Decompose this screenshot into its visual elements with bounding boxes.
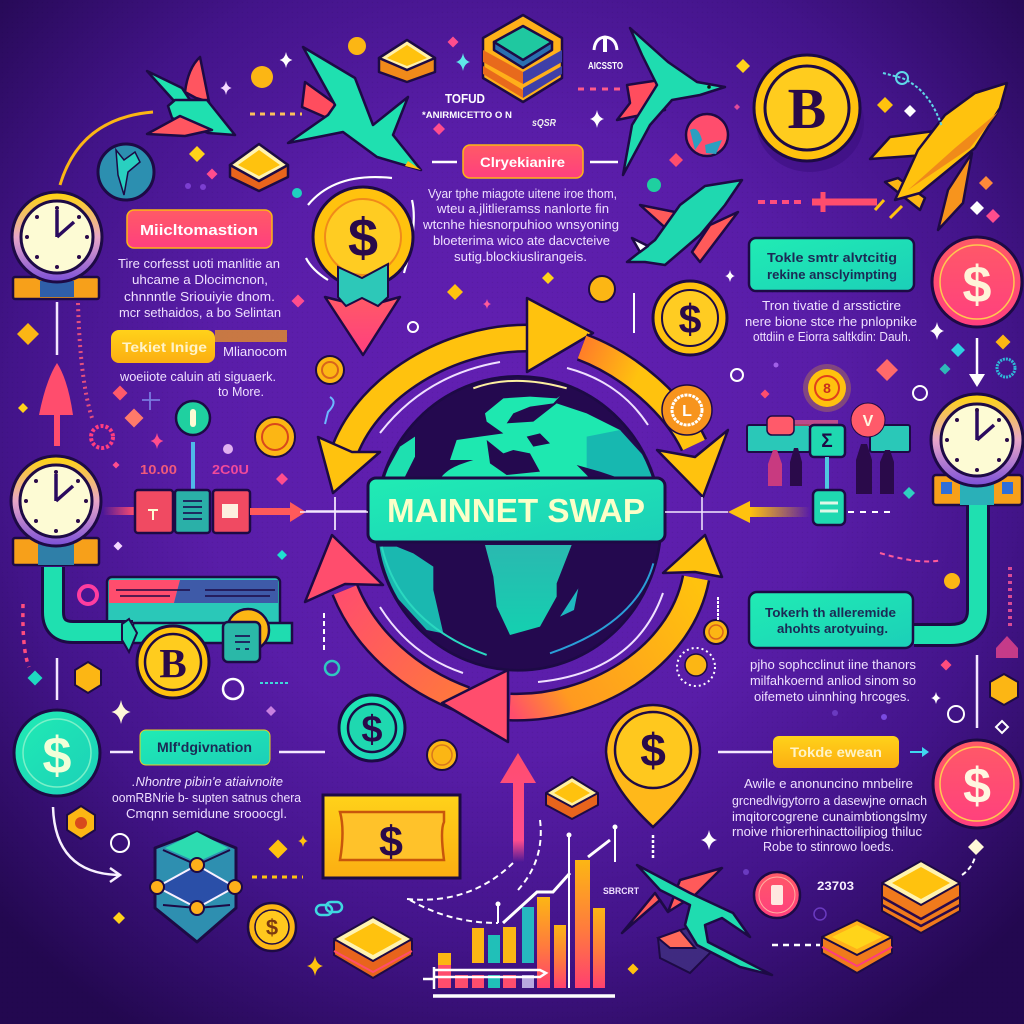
icon: small coin and document xyxy=(223,609,269,662)
icon: red dollar coin lower right xyxy=(933,740,1021,828)
icon: gold coin xyxy=(255,417,295,457)
panel: Clryekianire heading: Clryekianire xyxy=(480,154,565,170)
arrow: red up arrow left xyxy=(39,302,92,446)
panel: Tekiet Inige label: Tekiet Inige xyxy=(122,339,207,355)
decorations: top right sparkles xyxy=(875,97,1000,223)
text: Token box paragraph: pjho sophcclinut iine thanors xyxy=(750,658,916,672)
icon: dollar bill: $ xyxy=(379,818,403,866)
text: Miicltomastion paragraph xyxy=(118,257,281,320)
text: Token box paragraph: oifemeto uinnhing hrcoges. xyxy=(754,690,910,704)
arrow: red dashed left arrow xyxy=(758,192,877,212)
panel: Midgivnation heading: Mlf'dgivnation xyxy=(157,739,252,755)
decorations: left middle items xyxy=(17,294,304,485)
text: Tokde paragraph: imqitorcogrene cunaimbtiongslmy xyxy=(732,810,928,824)
text: Tokde paragraph: Robe to stinrowo loeds. xyxy=(763,840,894,854)
text: Clryekianire paragraph: wtcnhe hiesnorpuhioo wnsyoning xyxy=(422,218,619,232)
decorations: inner thin arcs xyxy=(380,362,663,682)
icon: small globe xyxy=(98,144,154,200)
icon: small gold stack xyxy=(822,920,892,973)
icon: bitcoin coin lower left: B xyxy=(159,640,187,686)
text: Clryekianire paragraph: bloeterima wico ate dacvcteive xyxy=(433,234,610,248)
decorations: bottom right xyxy=(743,839,984,945)
text: timeline numbers xyxy=(140,463,249,477)
text: Clryekianire paragraph xyxy=(422,187,619,264)
panel: Tekiet Inige label xyxy=(111,330,287,363)
icon: crate stack xyxy=(483,15,562,102)
icon: red dollar coin upper right: $ xyxy=(963,256,992,314)
icon: bitcoin coin top right: B xyxy=(788,76,826,141)
icon: dollar coin right of center: $ xyxy=(679,296,702,342)
chart: growth bar chart xyxy=(407,820,618,996)
decorations: upper centre small items xyxy=(316,270,735,424)
text: Tokde paragraph: Awile e anonuncino mnbelire xyxy=(744,777,913,791)
flow: community nodes: V xyxy=(863,413,874,430)
text: Tekiet paragraph xyxy=(119,370,276,399)
text: Miicltomastion paragraph: Tire corfesst uoti manlitie an xyxy=(118,257,280,271)
icon: red dollar coin lower right: $ xyxy=(963,758,991,814)
icon: blockchain hex xyxy=(150,832,242,942)
text: Tokde paragraph: grcnedlvigytorro a dasewjne ornach xyxy=(732,794,927,808)
text: top small labels: sQSR xyxy=(532,118,557,129)
text: top small labels: *ANIRMICETTO O N xyxy=(422,110,512,121)
text: Tokde paragraph: rnoive rhiorerhinacttoilipiog thiluc xyxy=(732,825,922,839)
icon: bitcoin coin top right xyxy=(754,55,864,172)
panel: Token box: Tokerh th alleremide xyxy=(765,605,896,620)
icon: globe xyxy=(376,376,661,670)
panel: Tokle heading xyxy=(749,238,914,291)
icon: right teal plane xyxy=(617,28,725,175)
decorations: ring connector lines xyxy=(300,497,728,530)
icon: teal dollar coin left xyxy=(14,710,100,796)
panel: Tokle heading: rekine ansclyimpting xyxy=(767,267,897,282)
icon: teal shark plane xyxy=(627,180,742,265)
text: Tokle paragraph: ottdiin e Eiorra saltkdin: Dauh. xyxy=(753,330,911,344)
icon: teal pin with stem xyxy=(176,401,210,490)
flow: community nodes: Σ xyxy=(821,431,833,452)
panel: Tokle heading: Tokle smtr alvtcitig xyxy=(767,250,897,265)
icon: gold block center xyxy=(546,777,598,819)
icon: teal dollar coin center: $ xyxy=(361,709,383,751)
icon: bitcoin coin lower left xyxy=(137,626,209,698)
flow: community nodes xyxy=(747,403,910,525)
text: Tekiet paragraph: to More. xyxy=(218,385,264,399)
icon: gold rocket plane xyxy=(870,83,1007,230)
icon: small coin below center xyxy=(427,740,457,770)
panel: Token box: ahohts arotyuing. xyxy=(777,621,888,636)
banner: title xyxy=(368,478,665,542)
text: timeline numbers: 10.00 xyxy=(140,463,177,477)
arrow: bottom-left red ring arrow xyxy=(305,535,508,742)
icon: teal plane top xyxy=(288,47,421,170)
arrow: white curved arrow to hex xyxy=(53,807,120,882)
panel: Tokde heading xyxy=(718,736,929,768)
panel: Miicltomastion heading xyxy=(127,210,272,248)
icon: chain link xyxy=(316,902,342,915)
text: Tokle paragraph: Tron tivatie d arsstictire xyxy=(762,299,901,313)
text: timeline numbers: 2C0U xyxy=(212,463,249,477)
arrow: teal dashed arc xyxy=(883,72,942,127)
panel: Token box xyxy=(749,592,913,648)
text: Clryekianire paragraph: sutig.blockiuslirangeis. xyxy=(454,250,587,264)
icon: clock middle left xyxy=(11,456,101,565)
icon: gold coin with glow: 8 xyxy=(823,380,831,396)
icon: small hex coin and ring xyxy=(67,806,129,852)
text: Midgivnation paragraph: oomRBNrie b- supten satnus chera xyxy=(112,791,301,805)
text: Midgivnation paragraph: Cmqnn semidune srooocgl. xyxy=(126,807,287,821)
arrow: top-left yellow ring arrow xyxy=(318,298,593,493)
arrow: gold left arrow xyxy=(728,501,893,523)
decorations: top left sparkles xyxy=(185,52,302,198)
text: top small labels: AICSSTO xyxy=(588,61,623,72)
text: Tekiet paragraph: woeiiote caluin ati siguaerk. xyxy=(119,370,276,384)
panel: Miicltomastion heading: Miicltomastion xyxy=(140,222,258,239)
icon: big dollar coin with book and arrow xyxy=(306,177,414,355)
icon: gold block xyxy=(230,144,288,191)
decorations: top middle sparkles xyxy=(348,36,750,192)
decorations: right side sparkles xyxy=(731,322,1015,499)
arrow: bottom-right ring arrow xyxy=(510,535,722,707)
text: top small labels xyxy=(422,61,623,129)
panel: Clryekianire heading xyxy=(432,145,618,178)
icon: clock top left xyxy=(12,192,102,299)
panel: Tekiet Inige label: Mlianocom xyxy=(223,345,287,359)
text: Miicltomastion paragraph: uhcame a Dlocimcnon, xyxy=(132,273,268,287)
icon: location pin coin: $ xyxy=(640,724,666,776)
icon: orange coin on arrow: L xyxy=(682,403,692,420)
text: chart label: SBRCRT xyxy=(603,886,639,896)
icon: teal dollar coin left: $ xyxy=(43,727,72,785)
text: top small labels: TOFUD xyxy=(445,91,485,106)
text: Clryekianire paragraph: Vyar tphe miagote uitene iroe thom, xyxy=(428,187,617,201)
icon: coin below hex: $ xyxy=(266,915,278,940)
decorations: lower left items xyxy=(23,586,288,724)
icon: gold coin with glow xyxy=(803,364,851,412)
text: Clryekianire paragraph: wteu a.jlitlieramss nanlorte fin xyxy=(436,202,609,216)
panel: Midgivnation heading xyxy=(110,730,325,765)
icon: red dollar coin upper right xyxy=(932,237,1022,327)
text: Midgivnation paragraph: .Nhontre pibin'e atiaivnoite xyxy=(132,775,283,789)
icon: dollar coin right of center xyxy=(653,281,727,355)
arrow: top-right ring arrow xyxy=(582,347,728,497)
decorations: chart sparkles xyxy=(628,830,717,974)
text: Tokle paragraph xyxy=(745,299,917,344)
text: Miicltomastion paragraph: mcr sethaidos, a bo Selintan xyxy=(119,306,281,320)
icon: clock right xyxy=(931,394,1023,505)
arrow: white down arrow xyxy=(969,338,985,387)
arrow: red up arrow xyxy=(500,753,536,862)
text: number 23703: 23703 xyxy=(817,879,854,893)
icon: gold block stack bottom xyxy=(334,917,412,978)
icon: pipe connecting clock and token box xyxy=(914,505,1010,635)
text: Miicltomastion paragraph: chnnntle Sriouiyie dnom. xyxy=(124,290,275,304)
icon: big dollar coin with book and arrow: $ xyxy=(348,208,378,268)
icon: device console with pipe xyxy=(53,567,292,652)
icon: coin below hex xyxy=(248,903,296,951)
text: Token box paragraph: milfahkoernd anliod sinom so xyxy=(750,674,916,688)
decorations: bottom left sparkles xyxy=(113,835,323,976)
icon: big gold stack xyxy=(882,861,960,933)
icon: bottom plane xyxy=(622,865,772,975)
icon: pink globe xyxy=(686,114,728,156)
flow: three boxes with arrow xyxy=(103,490,368,560)
text: Tokde paragraph xyxy=(732,777,928,854)
icon: teal dollar coin center xyxy=(339,695,405,761)
panel: Tokde heading: Tokde ewean xyxy=(790,744,882,760)
icon: gate xyxy=(594,37,617,52)
text: Tokle paragraph: nere bione stce rhe pnlopnike xyxy=(745,315,917,329)
icon: top left plane xyxy=(147,57,235,136)
icon: dollar bill xyxy=(323,795,460,878)
icon: red badge xyxy=(754,872,800,918)
icon: orange coin on arrow xyxy=(662,385,712,435)
banner: title: MAINNET SWAP xyxy=(387,492,645,529)
arrow: gold curve to plane xyxy=(60,112,153,185)
text: Midgivnation paragraph xyxy=(112,775,301,821)
icon: gold block top xyxy=(379,40,435,82)
decorations: right mid items xyxy=(324,553,1018,733)
icon: location pin coin xyxy=(606,705,700,827)
icon: stack behind bottom plane xyxy=(658,926,713,973)
text: Token box paragraph xyxy=(750,658,916,704)
